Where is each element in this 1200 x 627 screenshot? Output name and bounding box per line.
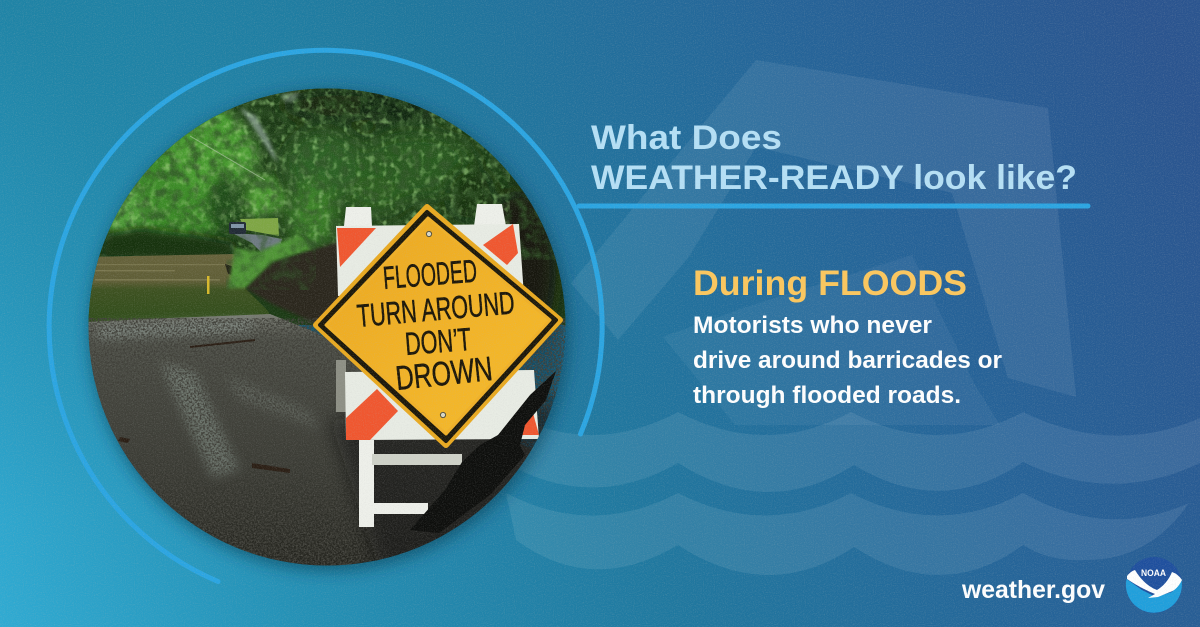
website url: weather.gov — [961, 576, 1105, 604]
photo: foliage shadow texture — [85, 85, 570, 260]
black bag — [410, 371, 556, 533]
sign: lettering: DON’T — [404, 321, 472, 362]
divider rule — [579, 204, 1088, 208]
photo: bright bush on bank — [228, 235, 312, 288]
photo: sky gaps — [240, 92, 300, 162]
photo: bright tree masses — [100, 108, 290, 245]
photo: medium green canopy patches — [280, 83, 556, 350]
photo: distant car — [229, 222, 246, 234]
logo: lower water — [1126, 579, 1182, 613]
heading — [591, 119, 1077, 197]
photo: bush leaf texture — [226, 234, 316, 290]
barricade: upper panel — [336, 224, 524, 296]
watermark: lower wave — [506, 493, 1189, 575]
body line one: Motorists who never — [693, 312, 932, 339]
photo: bright green trees on left — [101, 108, 290, 256]
photo: dark road lower right — [330, 400, 570, 570]
photo: water highlights — [90, 264, 230, 281]
photo: asphalt road — [88, 314, 532, 566]
sign: yellow face — [326, 218, 550, 434]
barricade: top posts — [344, 204, 506, 226]
logo: NOAA lettering: NOAA — [1141, 568, 1166, 579]
body line two: drive around barricades or — [693, 347, 1002, 374]
photo: yellow water marker — [207, 276, 210, 294]
photo: dark debris in water — [225, 264, 233, 275]
sign: lettering: TURN AROUND — [355, 284, 516, 334]
watermark: flood warning icon — [506, 60, 1200, 575]
road sign — [316, 207, 560, 445]
logo: white bird — [1127, 570, 1182, 598]
sign: lettering — [356, 260, 514, 390]
barricade: side bracket — [336, 360, 346, 412]
photo shadow — [89, 91, 569, 571]
sign: lettering: DROWN — [394, 350, 494, 398]
photo: flood water — [85, 254, 272, 322]
watermark: triangle outline — [571, 60, 1076, 397]
barricade — [336, 204, 539, 527]
photo: distant road — [234, 234, 282, 252]
sign: bolts — [426, 231, 446, 418]
NOAA logo — [1126, 557, 1182, 613]
barricade: legs and crossbars — [359, 440, 462, 527]
outer ring arc — [49, 50, 602, 582]
watermark: upper wave — [506, 412, 1200, 492]
photo: dark shaded tree base — [100, 228, 236, 260]
photo: bright foliage highlights — [101, 108, 289, 256]
photo: canopy leaf highlights — [230, 88, 510, 253]
body line three: through flooded roads. — [693, 382, 961, 409]
photo: distant lawn — [240, 218, 279, 236]
sign: black border — [320, 212, 556, 441]
heading line one: What Does — [591, 119, 782, 157]
photo: power line — [190, 136, 265, 180]
subheading: During FLOODS — [693, 264, 967, 303]
photo: road grit texture — [85, 318, 570, 570]
body text — [693, 312, 1002, 409]
photo: dark earth bank — [246, 241, 339, 322]
photo: road debris — [118, 339, 290, 473]
circular flood photo — [85, 83, 570, 570]
sign: lettering: FLOODED — [382, 253, 478, 296]
barricade: lower panel — [345, 370, 539, 440]
sign: outer yellow edge — [316, 207, 560, 445]
photo: tree canopy base — [85, 85, 570, 325]
heading line two: WEATHER-READY look like? — [591, 159, 1077, 197]
watermark: inner shape — [663, 255, 1000, 425]
photo: road wet highlights — [95, 320, 320, 478]
logo: disc top — [1126, 557, 1182, 613]
